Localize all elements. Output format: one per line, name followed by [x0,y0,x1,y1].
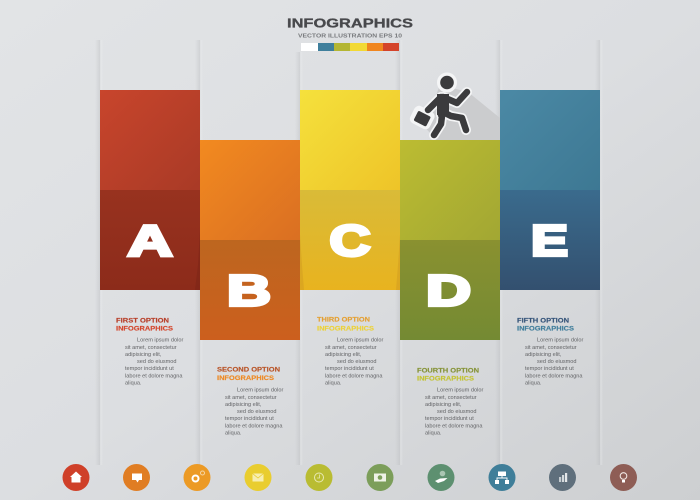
panel: column C [300,90,400,290]
text block: second option: tempor incididunt ut [225,416,274,422]
icon: hand with coin [428,464,454,491]
text block: second option: Lorem ipsum dolor [237,388,283,394]
text block: third option: sed do eiusmod [337,359,376,365]
text block: fourth option: INFOGRAPHICS [417,376,474,382]
text block: fourth option [417,368,483,436]
icon: running businessman [413,76,500,140]
text block: third option: adipisicing elit, [325,352,362,358]
icon: home [62,464,90,491]
text block: fourth option: sed do eiusmod [437,409,476,415]
icon: light bulb [610,464,637,491]
colour strip [301,43,399,51]
icon: envelope [244,464,272,491]
text block: third option: aliqua. [325,380,342,386]
icon: speech bubble [123,464,150,491]
subtitle: VECTOR ILLUSTRATION EPS 10 [298,34,402,40]
letter E: E [531,216,568,266]
text block: second option: sed do eiusmod [237,409,276,415]
text block: first option: sit amet, consectetur [125,345,177,351]
text block: fifth option: labore et dolore magna [525,374,583,380]
panel: column A [100,90,200,290]
panel: column E [500,90,600,290]
text block: third option: tempor incididunt ut [325,366,374,372]
text block: fourth option: adipisicing elit, [425,402,462,408]
letter B: B [227,266,271,316]
text block: first option: Lorem ipsum dolor [137,338,183,344]
text block: first option: adipisicing elit, [125,352,162,358]
text block: fourth option: sit amet, consectetur [425,395,477,401]
title: INFOGRAPHICS [287,16,413,30]
text block: fourth option: labore et dolore magna [425,424,483,430]
text block: first option: FIRST OPTION [116,318,169,324]
text block: first option: sed do eiusmod [137,359,176,365]
icon: hierarchy [488,464,516,491]
text block: second option: SECOND OPTION [217,368,280,374]
text block: third option: THIRD OPTION [317,318,370,324]
icon: clock [306,464,332,491]
text block: first option: aliqua. [125,380,142,386]
text block: fifth option: Lorem ipsum dolor [537,338,583,344]
text block: fourth option: aliqua. [425,430,442,436]
text block: first option: tempor incididunt ut [125,366,174,372]
letter A: A [128,216,172,266]
text block: fourth option: Lorem ipsum dolor [437,388,483,394]
text block: fifth option: sed do eiusmod [537,359,576,365]
text block: fifth option: INFOGRAPHICS [517,326,574,332]
text block: second option: adipisicing elit, [225,402,262,408]
text block: fourth option: FOURTH OPTION [417,368,479,374]
text block: third option: labore et dolore magna [325,374,383,380]
text block: third option: sit amet, consectetur [325,345,377,351]
text block: fifth option: FIFTH OPTION [517,318,569,324]
text block: second option: INFOGRAPHICS [217,376,274,382]
text block: fourth option: tempor incididunt ut [425,416,474,422]
text block: first option [116,318,183,386]
text block: fifth option: tempor incididunt ut [525,366,574,372]
text block: first option: INFOGRAPHICS [116,326,173,332]
text block: second option [217,368,283,436]
text block: third option [317,318,383,386]
text block: first option: labore et dolore magna [125,374,183,380]
text block: fifth option: aliqua. [525,380,542,386]
icon: gears [184,464,210,491]
text block: fifth option: adipisicing elit, [525,352,562,358]
text block: second option: aliqua. [225,430,242,436]
icon: bar chart [549,464,576,491]
text block: third option: Lorem ipsum dolor [337,338,383,344]
text block: second option: sit amet, consectetur [225,395,277,401]
letter D: D [426,266,471,316]
text block: fifth option [517,318,583,386]
text block: third option: INFOGRAPHICS [317,326,374,332]
icon: banknote [366,464,394,491]
panel: column D [400,140,500,340]
text block: fifth option: sit amet, consectetur [525,345,577,351]
text block: second option: labore et dolore magna [225,424,283,430]
panel: column B [200,140,300,340]
letter C: C [330,216,370,266]
